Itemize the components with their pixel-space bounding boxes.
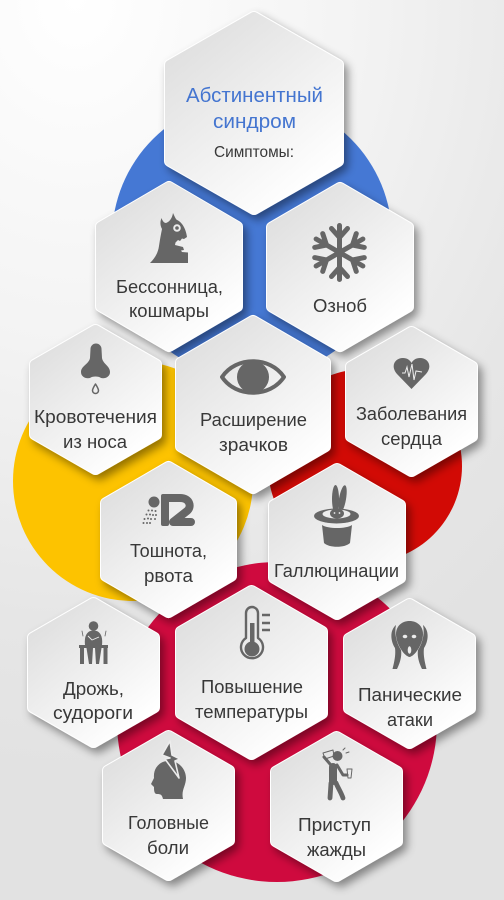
icon: rabbit in hat	[314, 485, 359, 547]
panel: nausea	[106, 467, 231, 612]
icon: snowflake	[312, 226, 367, 280]
heading	[186, 85, 323, 133]
panel: hallucinations	[274, 469, 400, 614]
label: Заболевания	[356, 403, 467, 424]
icon: heart	[394, 358, 429, 389]
label: Тошнота,	[130, 540, 207, 561]
label: Головные	[128, 812, 209, 833]
label	[356, 403, 467, 449]
label	[53, 678, 133, 723]
panel: fever	[181, 591, 322, 754]
heading: Абстинентный	[186, 85, 323, 107]
label: жажды	[307, 839, 366, 860]
label: Кровотечения	[34, 406, 157, 427]
label	[200, 409, 307, 455]
icon: vomiting person	[142, 494, 191, 526]
label: Панические	[358, 684, 462, 705]
circle: red	[268, 369, 462, 563]
label: Расширение	[200, 409, 307, 430]
icon: person drinking	[323, 748, 352, 798]
label: судороги	[53, 702, 133, 723]
label: кошмары	[129, 300, 209, 321]
panel: chills	[272, 188, 408, 346]
panel: thirst	[276, 737, 397, 876]
icon: eye	[222, 361, 284, 393]
label	[358, 684, 462, 730]
label	[195, 676, 308, 722]
panel: tremor	[33, 603, 154, 742]
panel: nosebleed	[34, 330, 157, 469]
label	[130, 540, 207, 586]
label	[298, 814, 371, 860]
subheading: Симптомы:	[214, 144, 294, 161]
label: Озноб	[313, 295, 367, 316]
panel: dilated pupils	[181, 321, 325, 488]
circle: yellow	[13, 361, 253, 601]
circle: crimson	[117, 562, 437, 882]
icon: nose	[81, 344, 110, 394]
label: Повышение	[201, 676, 303, 697]
icon: scream face	[391, 621, 428, 669]
panel: title	[170, 17, 338, 209]
icon: seated person	[79, 621, 108, 664]
label: Бессонница,	[116, 276, 223, 297]
label: температуры	[195, 701, 308, 722]
label: Галлюцинации	[274, 560, 399, 581]
label	[128, 812, 209, 858]
label: атаки	[387, 709, 433, 730]
icon: monster	[150, 213, 188, 263]
panel: heart disease	[351, 332, 472, 471]
label	[116, 276, 223, 321]
label: из носа	[63, 431, 128, 452]
panel: insomnia	[101, 187, 237, 346]
panel: panic attacks	[349, 604, 470, 743]
label	[34, 406, 157, 452]
circle: blue	[112, 98, 392, 378]
icon: thermometer	[241, 607, 270, 658]
label: Дрожь,	[63, 678, 124, 699]
label: сердца	[381, 428, 443, 449]
icon: head with lightning	[151, 741, 186, 799]
label: зрачков	[219, 434, 288, 455]
heading: синдром	[213, 111, 296, 133]
label: рвота	[144, 565, 194, 586]
label: Приступ	[298, 814, 371, 835]
label: боли	[147, 837, 189, 858]
panel: headache	[108, 736, 229, 875]
